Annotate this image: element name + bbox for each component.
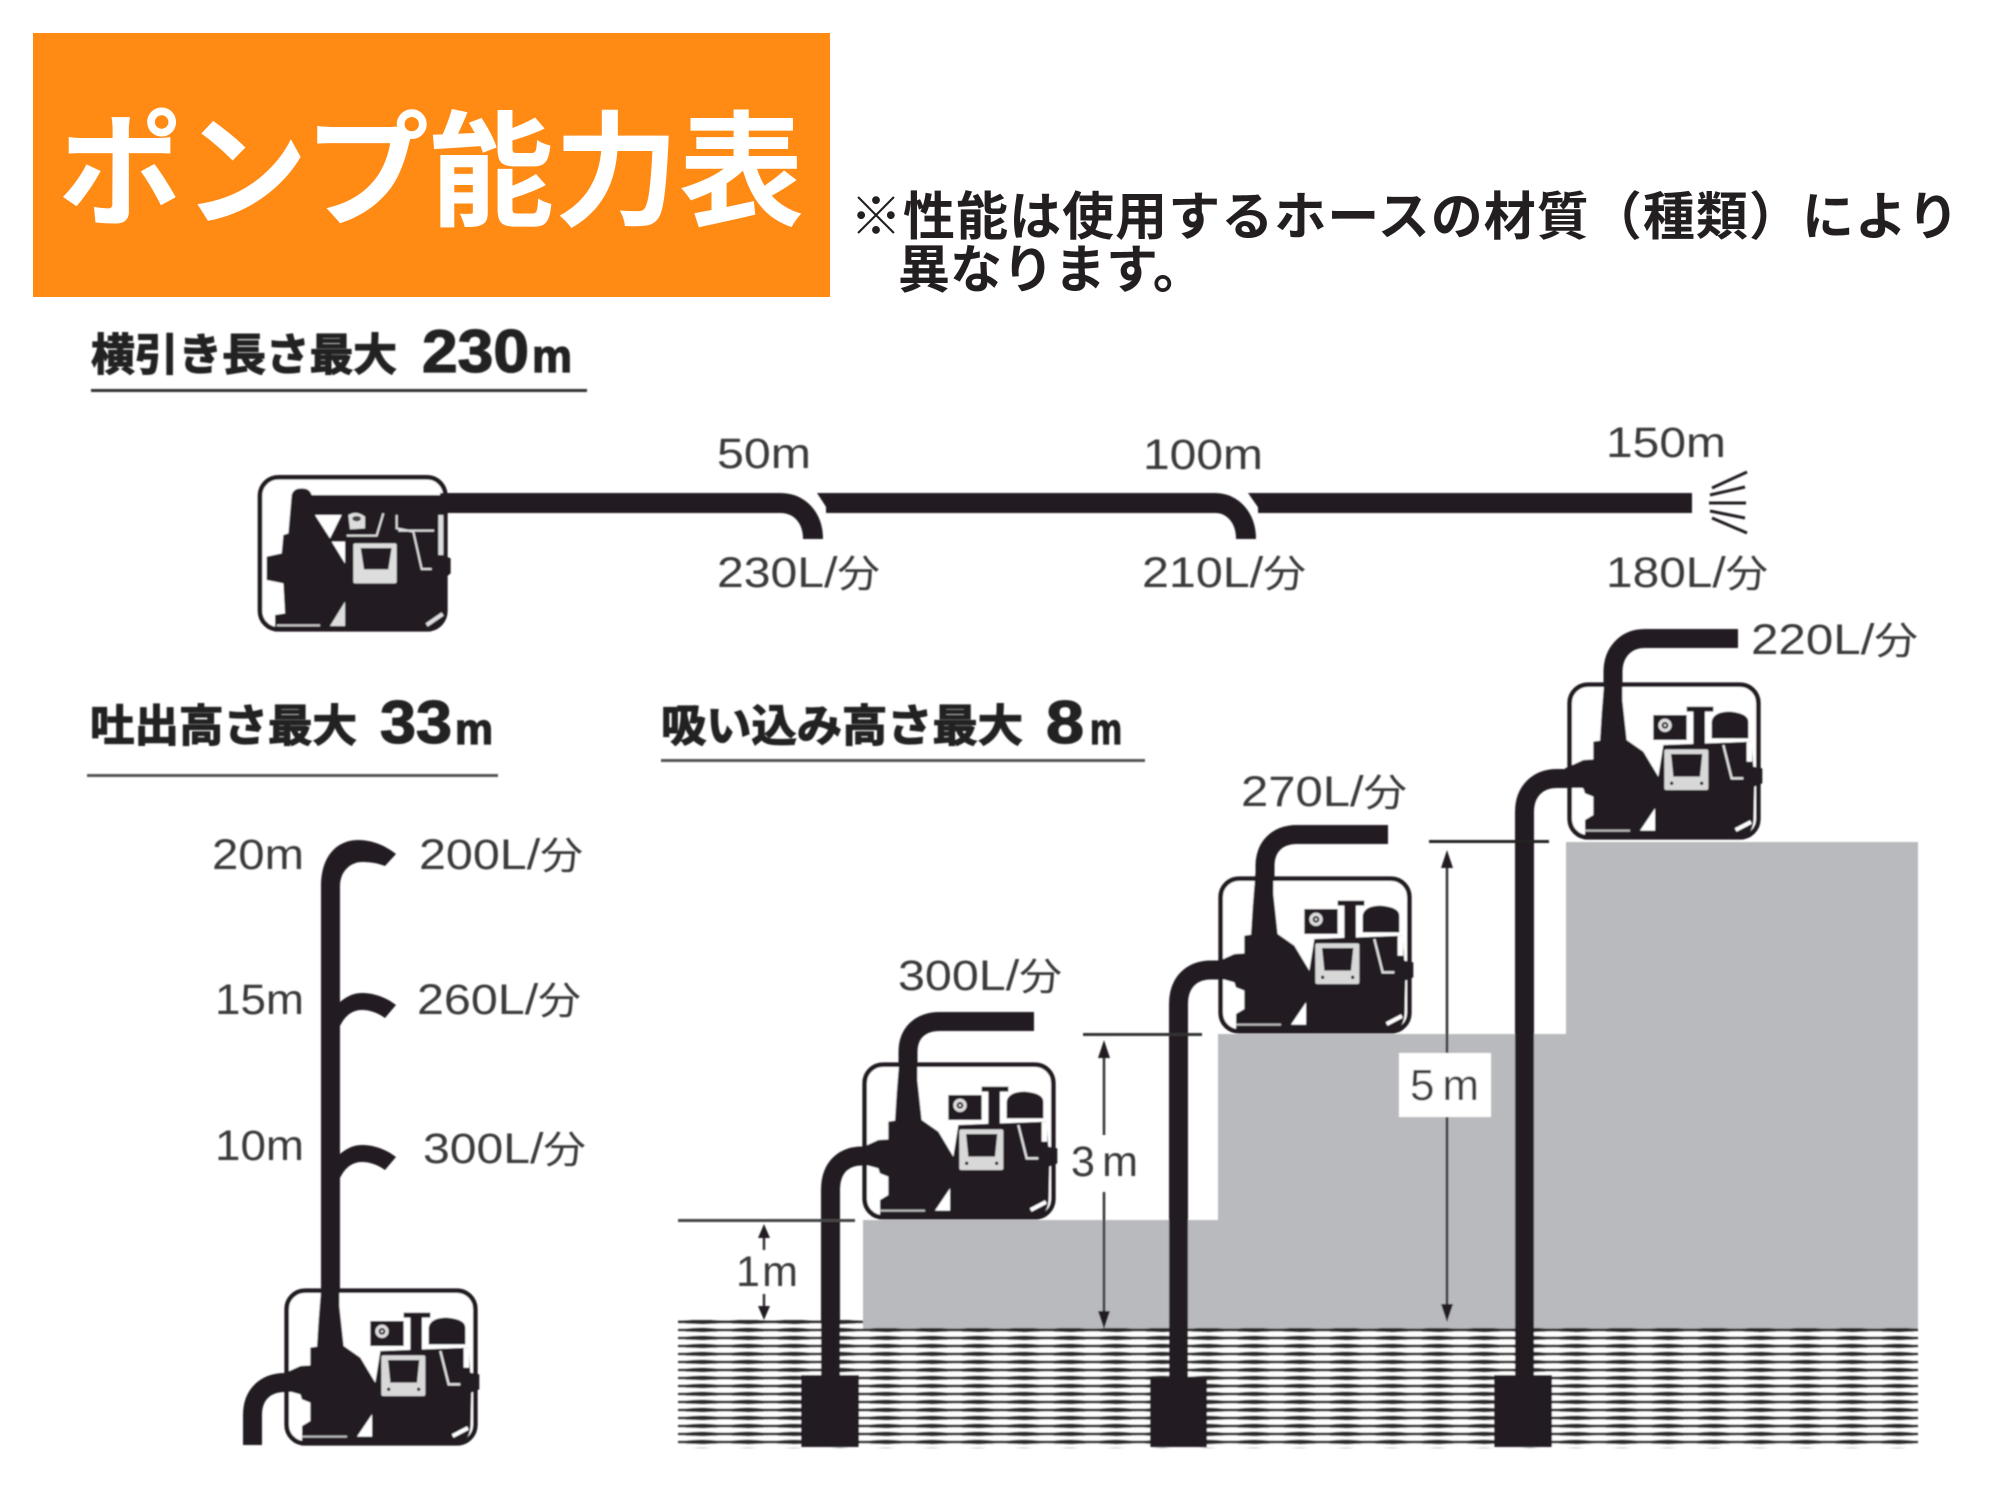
heading: suction height: m — [1090, 705, 1122, 754]
suction flow labels — [898, 616, 1918, 1000]
horizontal distance and flow labels: 50m — [717, 430, 811, 478]
discharge height labels — [212, 831, 586, 1173]
discharge height hose — [321, 840, 396, 1325]
heading: discharge height: 吐出高さ最大 — [90, 702, 357, 751]
suction pump 3 m — [1150, 834, 1413, 1447]
discharge height labels: 15m — [215, 976, 304, 1024]
heading: suction height: 吸い込み高さ最大 — [661, 702, 1023, 751]
suction pump 5 m — [1494, 638, 1762, 1447]
heading: horizontal length: m — [532, 330, 572, 382]
horizontal distance and flow labels: 230L/ 分 — [717, 549, 880, 597]
horizontal distance and flow labels: 180L/ 分 — [1606, 549, 1768, 597]
discharge height labels: 20m — [212, 831, 304, 879]
heading: suction height — [661, 689, 1145, 762]
horizontal distance and flow labels — [717, 419, 1768, 597]
heading: horizontal length: 横引き長さ最大 — [91, 331, 397, 380]
title banner — [33, 33, 830, 297]
heading: discharge height: 33 — [380, 689, 452, 756]
heading: horizontal length: 230 — [422, 318, 529, 385]
level line 1 m — [678, 1219, 855, 1222]
horizontal distance and flow labels: 100m — [1143, 431, 1263, 479]
water — [678, 1321, 1918, 1447]
level line 3 m — [1083, 1033, 1202, 1036]
suction pump 1 m — [801, 1022, 1057, 1447]
discharge height labels: 200L/ 分 — [419, 831, 583, 879]
performance note — [850, 189, 1959, 300]
title banner: ポンプ能力表 — [58, 104, 804, 243]
5 m dimension — [1399, 850, 1491, 1322]
heading: discharge height — [87, 689, 498, 777]
horizontal distance and flow labels: 210L/ 分 — [1142, 549, 1306, 597]
heading: horizontal length — [91, 318, 587, 392]
performance note: 異なります。 — [898, 242, 1205, 300]
suction flow labels: 270L/ 分 — [1241, 768, 1407, 816]
discharge height pump — [252, 1286, 479, 1445]
heading: suction height: 8 — [1046, 689, 1084, 756]
discharge height labels: 10m — [215, 1122, 304, 1170]
3 m dimension — [1071, 1040, 1138, 1329]
staircase ground — [863, 842, 1918, 1332]
discharge height labels: 260L/ 分 — [417, 976, 581, 1024]
horizontal pump icon — [260, 477, 451, 630]
performance note: ※性能は使用するホースの材質（種類）により — [850, 189, 1959, 247]
5 m dimension: 5m — [1410, 1061, 1479, 1110]
water stripes — [678, 1320, 1918, 1448]
1 m dimension — [736, 1224, 798, 1320]
3 m dimension: 3m — [1071, 1138, 1138, 1186]
horizontal distance and flow labels: 150m — [1606, 419, 1726, 467]
suction flow labels: 220L/ 分 — [1751, 616, 1918, 664]
level line 5 m — [1429, 840, 1549, 843]
spray icon — [1709, 472, 1747, 533]
horizontal hose with outlets — [440, 493, 1692, 539]
1 m dimension: 1m — [736, 1248, 798, 1296]
discharge height labels: 300L/ 分 — [423, 1125, 586, 1173]
suction flow labels: 300L/ 分 — [898, 952, 1062, 1000]
heading: discharge height: m — [455, 705, 493, 754]
